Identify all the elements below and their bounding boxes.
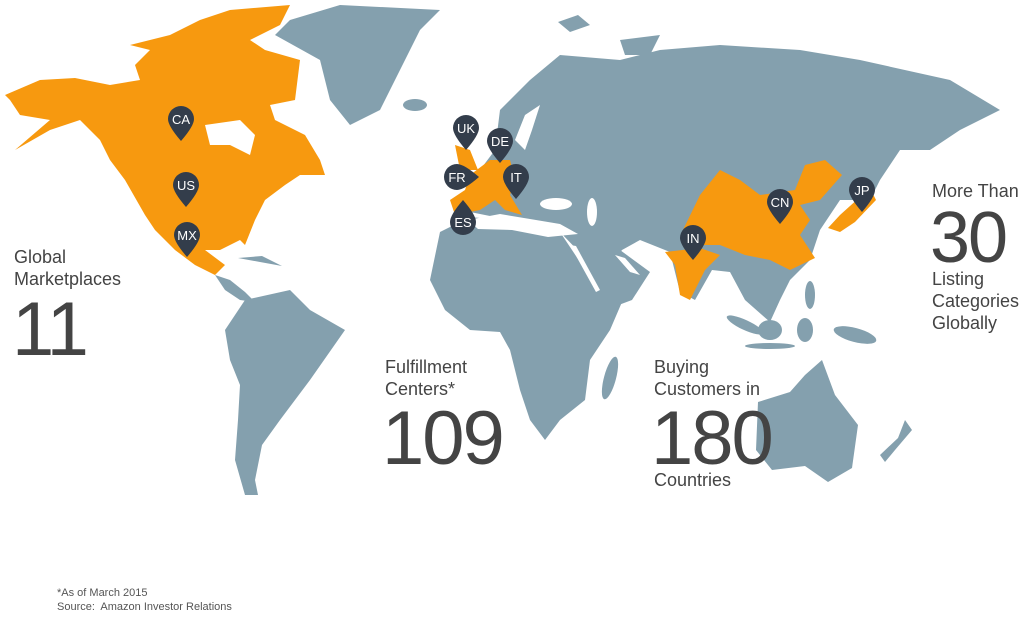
label: more than: More Than	[932, 181, 1019, 201]
pin: US	[173, 172, 199, 207]
label: buying customers in: Buying	[654, 357, 709, 377]
pin: IN: IN	[686, 231, 700, 246]
number: 109: 109	[382, 396, 503, 481]
footnote: Source: Amazon Investor Relations	[57, 601, 232, 613]
pin: FR	[444, 164, 479, 190]
pin: CN	[767, 189, 793, 224]
stat: fulfillment centers	[382, 357, 503, 481]
pin: CA	[168, 106, 194, 141]
continent: north america	[5, 5, 325, 275]
continent: eurasia	[470, 15, 1000, 322]
pin: CA: CA	[172, 112, 190, 127]
label: listing categories globally	[932, 269, 1019, 333]
pin: ES	[450, 200, 476, 235]
label: global marketplaces	[14, 247, 121, 289]
label: fulfillment centers: Fulfillment	[385, 357, 467, 377]
label: global marketplaces: Marketplaces	[14, 269, 121, 289]
continent: africa	[430, 217, 625, 440]
pins	[168, 106, 875, 260]
label: global marketplaces: Global	[14, 247, 66, 267]
pin: IN	[680, 225, 706, 260]
pin: JP: JP	[854, 183, 870, 198]
number: 11: 11	[12, 287, 87, 372]
pin: IT: IT	[510, 170, 522, 185]
footnote	[57, 587, 232, 613]
pin: MX	[174, 222, 200, 257]
pin: UK	[453, 115, 479, 150]
label: listing categories globally: Globally	[932, 313, 997, 333]
number: 30: 30	[930, 198, 1006, 278]
pin: UK: UK	[457, 121, 475, 136]
label: fulfillment centers	[385, 357, 467, 399]
label: fulfillment centers: Centers*	[385, 379, 455, 399]
footnote: *As of March 2015	[57, 587, 148, 599]
pin: JP	[849, 177, 875, 212]
pin: FR: FR	[448, 170, 466, 185]
stat: global marketplaces	[12, 247, 121, 372]
continent: greenland and iceland	[275, 5, 440, 125]
label: listing categories globally: Listing	[932, 269, 984, 289]
countries: asia orange	[665, 160, 876, 300]
continent: oceania	[725, 281, 912, 482]
continent: central and south america	[215, 256, 345, 495]
pin: US: US	[177, 178, 195, 193]
label: countries: Countries	[654, 470, 731, 490]
number: 180: 180	[651, 396, 772, 481]
stat: buying customers	[651, 357, 772, 490]
countries: europe orange	[450, 145, 522, 215]
inland seas	[468, 105, 640, 292]
label: listing categories globally: Categories	[932, 291, 1019, 311]
label: buying customers in	[654, 357, 760, 399]
pin: IT	[503, 164, 529, 199]
pin: ES: ES	[454, 215, 472, 230]
pin: MX: MX	[177, 228, 197, 243]
stat: listing categories	[930, 181, 1019, 333]
pin: CN: CN	[771, 195, 789, 210]
pin: DE	[487, 128, 513, 163]
label: buying customers in: Customers in	[654, 379, 760, 399]
pin: DE: DE	[491, 134, 509, 149]
